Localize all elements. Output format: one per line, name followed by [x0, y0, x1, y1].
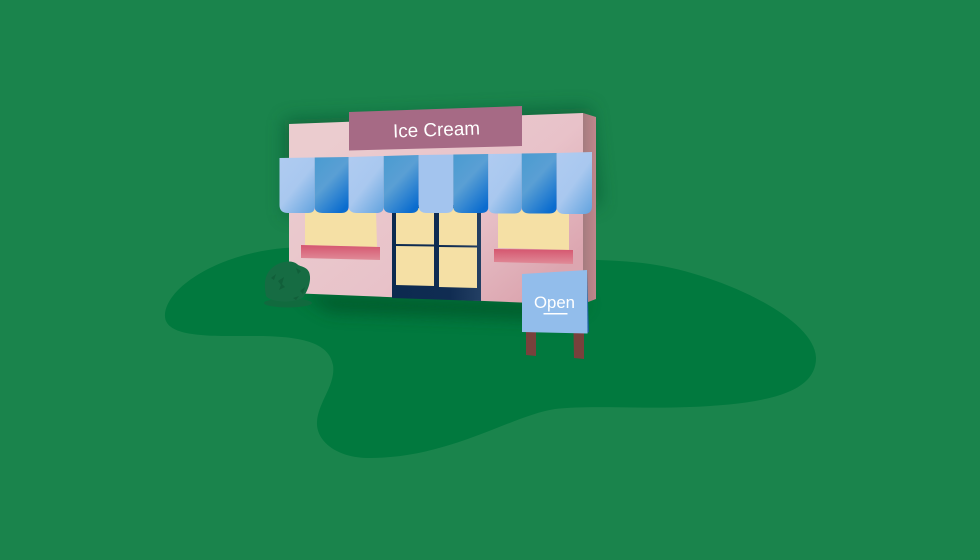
ground shadow under shop	[300, 293, 590, 320]
door	[392, 205, 481, 301]
open sign	[522, 270, 589, 359]
shop back shadow	[285, 108, 600, 215]
shop building	[289, 113, 596, 305]
left window box	[301, 245, 380, 260]
awning	[280, 152, 592, 214]
right post	[574, 333, 584, 359]
left post	[526, 332, 536, 356]
left window	[301, 210, 380, 260]
sign edge	[587, 270, 589, 333]
open underline	[544, 313, 568, 314]
front wall	[289, 113, 583, 305]
bush	[264, 261, 312, 308]
shop sign banner	[349, 106, 522, 150]
door panes	[396, 208, 477, 288]
right window	[494, 210, 573, 264]
ground blob	[165, 247, 816, 458]
side wall	[583, 113, 596, 304]
open label: Open	[534, 293, 575, 312]
sign board	[522, 270, 588, 334]
right window box	[494, 249, 573, 264]
shop name: Ice Cream	[393, 118, 480, 143]
